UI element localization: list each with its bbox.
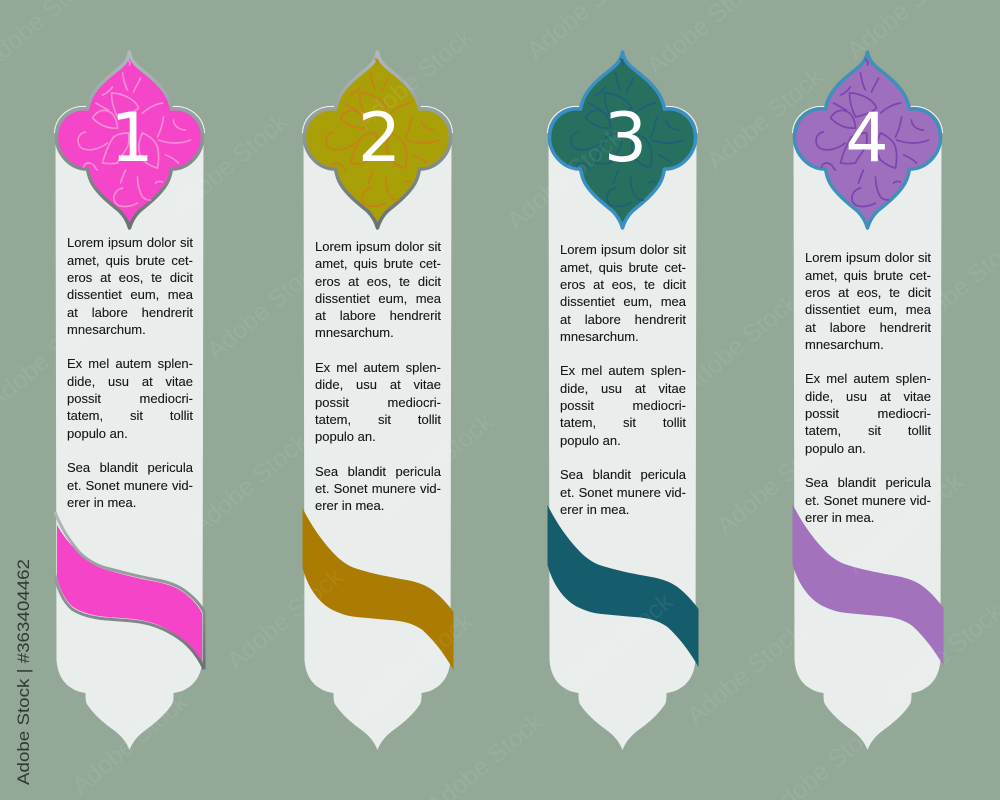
number 2: 2	[358, 98, 401, 178]
text block 4: dissentiet eum, mea	[805, 302, 931, 317]
text block 4: tatem, sit tollit	[805, 423, 931, 438]
text block 3: Ex mel autem splen-	[560, 363, 686, 378]
background watermarks: Adobe Stock	[702, 62, 829, 175]
background watermarks: Adobe Stock	[187, 427, 314, 540]
text block 4: mnesarchum.	[805, 337, 884, 352]
text block 4: at labore hendrerit	[805, 320, 931, 335]
text block 4: Sea blandit pericula	[805, 475, 931, 490]
text block 3: dide, usu at vitae	[560, 381, 686, 396]
text block 4: Ex mel autem splen-	[805, 371, 931, 386]
text block 3: Lorem ipsum dolor sit	[560, 242, 686, 257]
panel: step 4	[792, 50, 944, 750]
text block 1: dide, usu at vitae	[67, 374, 193, 389]
text block 4: possit mediocri-	[805, 406, 931, 421]
text block 1: eros at eos, te dicit	[67, 270, 193, 285]
panel: step 2	[302, 50, 454, 750]
text block 1: Sea blandit pericula	[67, 460, 193, 475]
text block 3: tatem, sit tollit	[560, 415, 686, 430]
background watermarks: Adobe Stock	[842, 467, 969, 580]
text block 3: Sea blandit pericula	[560, 467, 686, 482]
text block 3: mnesarchum.	[560, 329, 639, 344]
text block 4: Lorem ipsum dolor sit	[805, 250, 931, 265]
text block 2: tatem, sit tollit	[315, 412, 441, 427]
text block 2: at labore hendrerit	[315, 308, 441, 323]
background watermarks: Adobe Stock	[222, 562, 349, 675]
text block 1: Ex mel autem splen-	[67, 356, 193, 371]
background watermarks: Adobe Stock	[352, 22, 479, 135]
text block 1: populo an.	[67, 426, 128, 441]
text block 4: eros at eos, te dicit	[805, 285, 931, 300]
panel 3 graphics	[547, 50, 698, 750]
text block 1: mnesarchum.	[67, 322, 146, 337]
text block 3: at labore hendrerit	[560, 312, 686, 327]
text block 3: et. Sonet munere vid-	[560, 485, 686, 500]
text block 1: et. Sonet munere vid-	[67, 478, 193, 493]
text block 1: Lorem ipsum dolor sit	[67, 235, 193, 250]
background watermarks: Adobe Stock	[712, 427, 839, 540]
background watermarks: Adobe Stock	[682, 617, 809, 730]
number 3: 3	[604, 98, 647, 178]
panel: step 1	[54, 50, 206, 750]
number 4: 4	[845, 98, 889, 178]
text block 2: possit mediocri-	[315, 395, 441, 410]
text block 3: possit mediocri-	[560, 398, 686, 413]
text block 3: amet, quis brute cet-	[560, 260, 686, 275]
text block 1: erer in mea.	[67, 495, 136, 510]
text block 1: at labore hendrerit	[67, 305, 193, 320]
text block 2: erer in mea.	[315, 498, 384, 513]
text block 2: mnesarchum.	[315, 325, 394, 340]
text block 1: tatem, sit tollit	[67, 408, 193, 423]
background watermarks: Adobe Stock	[202, 252, 329, 365]
text block 3	[560, 242, 686, 517]
background watermarks: Adobe Stock	[502, 122, 629, 235]
text block 2: populo an.	[315, 429, 376, 444]
text block 4: populo an.	[805, 441, 866, 456]
text block 4: et. Sonet munere vid-	[805, 493, 931, 508]
text block 1: amet, quis brute cet-	[67, 253, 193, 268]
text block 2: amet, quis brute cet-	[315, 256, 441, 271]
background watermarks: Adobe Stock	[352, 607, 479, 720]
panel 1 graphics	[54, 50, 206, 750]
stock id label: Adobe Stock | #363404462	[14, 559, 33, 785]
text block 2: et. Sonet munere vid-	[315, 481, 441, 496]
text block 2: Ex mel autem splen-	[315, 360, 441, 375]
text block 3: dissentiet eum, mea	[560, 294, 686, 309]
text block 4: erer in mea.	[805, 510, 874, 525]
text block 4: dide, usu at vitae	[805, 389, 931, 404]
text block 3: eros at eos, te dicit	[560, 277, 686, 292]
background watermarks: Adobe Stock	[67, 687, 194, 800]
text block 2: dissentiet eum, mea	[315, 291, 441, 306]
text block 1	[67, 235, 194, 510]
text block 2: dide, usu at vitae	[315, 377, 441, 392]
panel 4 graphics	[792, 50, 944, 750]
panel: step 3	[547, 50, 698, 750]
text block 1: dissentiet eum, mea	[67, 287, 193, 302]
background watermarks: Adobe Stock	[552, 587, 679, 700]
text block 4: amet, quis brute cet-	[805, 268, 931, 283]
text block 2: Sea blandit pericula	[315, 464, 441, 479]
text block 3: erer in mea.	[560, 502, 629, 517]
number 1: 1	[110, 98, 154, 178]
text block 4	[805, 250, 932, 525]
text block 1: possit mediocri-	[67, 391, 193, 406]
text block 2	[315, 239, 442, 513]
text block 2: Lorem ipsum dolor sit	[315, 239, 441, 254]
text block 2: eros at eos, te dicit	[315, 274, 441, 289]
panel 2 graphics	[302, 50, 454, 750]
background watermarks: Adobe Stock	[677, 287, 804, 400]
text block 3: populo an.	[560, 433, 621, 448]
background watermarks: Adobe Stock	[167, 107, 294, 220]
background watermarks: Adobe Stock	[372, 407, 499, 520]
